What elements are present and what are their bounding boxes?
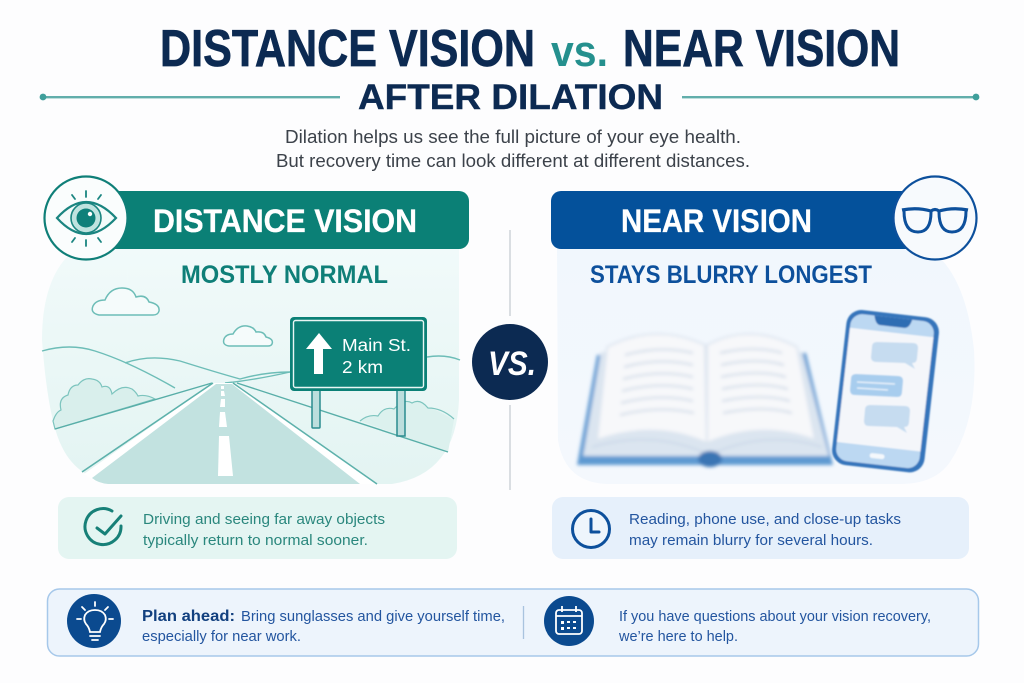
title: NEAR VISION <box>623 20 900 78</box>
tip text: questions: we’re here to help. <box>618 629 738 645</box>
card text <box>143 512 385 549</box>
intro text <box>276 127 750 171</box>
panel background <box>557 249 974 484</box>
road <box>84 383 377 484</box>
tip text: plan ahead: especially for near work. <box>142 629 301 645</box>
panel: bottom tips <box>48 589 978 656</box>
card text: may remain blurry for several hours. <box>629 533 873 549</box>
subtitle: after dilation <box>40 78 979 117</box>
chat bubbles <box>850 342 918 433</box>
tip text: plan ahead: Bring sunglasses and give yourself time, <box>241 609 505 625</box>
panel: distance vision <box>42 176 469 484</box>
road dashes <box>218 386 233 476</box>
card: distance vision note <box>58 497 457 559</box>
heading text: NEAR VISION <box>621 203 812 239</box>
illustration: phone <box>830 308 941 474</box>
subtitle: after dilation: AFTER DILATION <box>358 78 663 117</box>
panel: near vision <box>551 176 976 484</box>
icon: clock <box>572 510 610 548</box>
heading bar <box>90 191 469 249</box>
icon: calendar <box>544 596 594 646</box>
bushes <box>53 379 155 429</box>
icon: glasses <box>894 176 976 260</box>
shoulder lines <box>55 383 448 452</box>
status heading: MOSTLY NORMAL <box>181 261 388 289</box>
road sign: 2 km <box>342 357 383 377</box>
center divider and vs badge: VS. <box>488 345 536 383</box>
icon: eye <box>44 176 128 260</box>
title: vs. <box>551 27 608 76</box>
status heading: STAYS BLURRY LONGEST <box>590 261 872 289</box>
road sign: Main St. <box>342 335 411 355</box>
center divider and vs badge <box>472 230 548 490</box>
road sign <box>290 317 427 391</box>
intro text: But recovery time can look different at different distances. <box>276 151 750 171</box>
tip text: questions: If you have questions about your vision recovery, <box>619 609 931 625</box>
tip text: plan ahead <box>142 608 505 645</box>
panel background <box>42 249 459 484</box>
card: near vision note <box>552 497 969 559</box>
tip text: plan ahead: Plan ahead: <box>142 608 235 625</box>
tip text: questions <box>618 609 931 645</box>
card text: Driving and seeing far away objects <box>143 512 385 528</box>
title <box>160 20 900 78</box>
card text: Reading, phone use, and close-up tasks <box>629 512 901 528</box>
sign posts <box>312 390 405 436</box>
heading text: DISTANCE VISION <box>153 203 417 239</box>
card text: typically return to normal sooner. <box>143 533 368 549</box>
icon: check <box>85 509 121 545</box>
landscape illustration <box>42 288 460 484</box>
title: DISTANCE VISION <box>160 20 535 78</box>
icon: light bulb <box>67 594 121 648</box>
heading bar <box>551 191 936 249</box>
hills <box>42 347 460 388</box>
intro text: Dilation helps us see the full picture of your eye health. <box>285 127 741 147</box>
illustration: blurry book <box>577 334 833 467</box>
clouds <box>92 288 272 346</box>
card text <box>629 512 901 549</box>
